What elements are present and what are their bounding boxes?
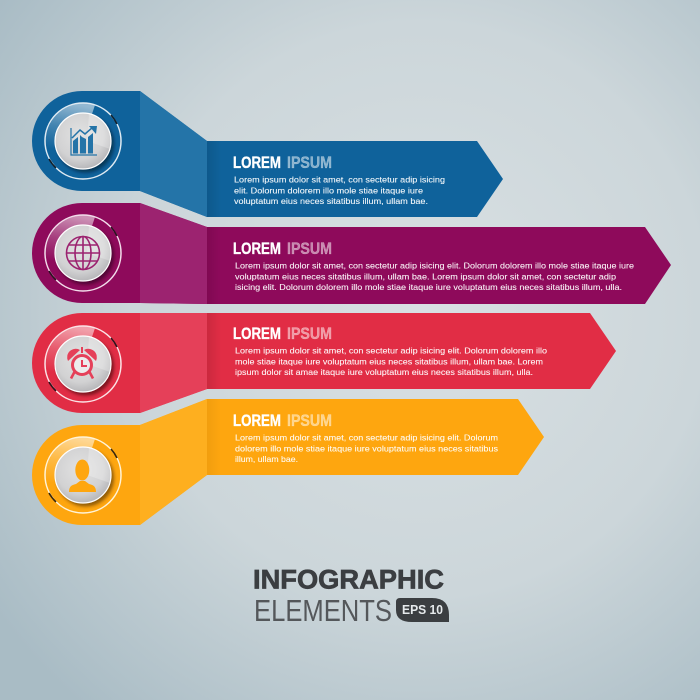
purple fold [140,203,207,304]
blue body text: voluptatum eius neces sitatibus illum, ullam bae. [234,196,428,206]
badge: EPS 10 [396,598,449,622]
panel: purple globe banner [32,203,671,304]
purple body text: Lorem ipsum dolor sit amet, con sectetur adip isicing elit. Dolorum dolorem illo mole stiae itaque iure [235,260,634,270]
panel: orange person banner [32,399,544,525]
red heading: LOREM [233,324,281,343]
red body text: mole stiae itaque iure voluptatum eius neces sitatibus illum, ullam bae. Lorem [235,356,543,366]
blue fold [140,91,207,217]
red body text: ipsum dolor sit amae itaque iure voluptatum eius neces sitatibus illum, ulla. [235,367,533,377]
blue body text: Lorem ipsum dolor sit amet, con sectetur adip isicing [234,174,445,184]
badge: EPS 10: EPS 10 [402,603,443,617]
purple heading: IPSUM [287,239,332,258]
purple glass button [45,215,121,291]
blue glass button [45,103,121,179]
blue heading: LOREM [233,153,281,172]
heading: infographic: INFOGRAPHIC [253,564,444,594]
orange glass button [45,437,121,513]
orange body text: illum, ullam bae. [235,454,298,464]
blue banner shape [32,91,503,217]
purple body text [235,260,634,292]
red heading: IPSUM [287,324,332,343]
red glass button [45,326,121,402]
panel: blue chart banner [32,91,503,217]
icon: line chart [71,126,97,155]
purple heading: LOREM [233,239,281,258]
blue body text: elit. Dolorum dolorem illo mole stiae itaque iure [234,186,423,196]
blue body text [234,174,445,206]
red fold [140,313,207,413]
heading: elements: ELEMENTS [254,593,392,628]
orange fold [140,399,207,525]
title: infographic elements [253,564,449,628]
orange body text: dolorem illo mole stiae itaque iure voluptatum eius neces sitatibus [235,444,498,454]
orange heading: LOREM [233,411,281,430]
red body text: Lorem ipsum dolor sit amet, con sectetur adip isicing elit. Dolorum dolorem illo [235,346,547,356]
orange banner shape [32,399,544,525]
blue heading: IPSUM [287,153,332,172]
icon: alarm clock [67,347,97,378]
red banner shape [32,313,616,413]
purple banner shape [32,203,671,304]
orange body text: Lorem ipsum dolor sit amet, con sectetur adip isicing elit. Dolorum [235,432,498,442]
purple body text: isicing elit. Dolorum dolorem illo mole stiae itaque iure voluptatum eius neces sitatibus illum, ulla. [235,282,622,292]
purple body text: voluptatum eius neces sitatibus illum, ullam bae. Lorem ipsum dolor sit amet, con sectetur adip [235,272,616,282]
red body text [235,346,547,377]
orange body text [235,432,498,464]
icon: person [69,460,96,492]
icon: globe [66,236,100,270]
orange heading: IPSUM [287,411,332,430]
panel: red clock banner [32,313,616,413]
